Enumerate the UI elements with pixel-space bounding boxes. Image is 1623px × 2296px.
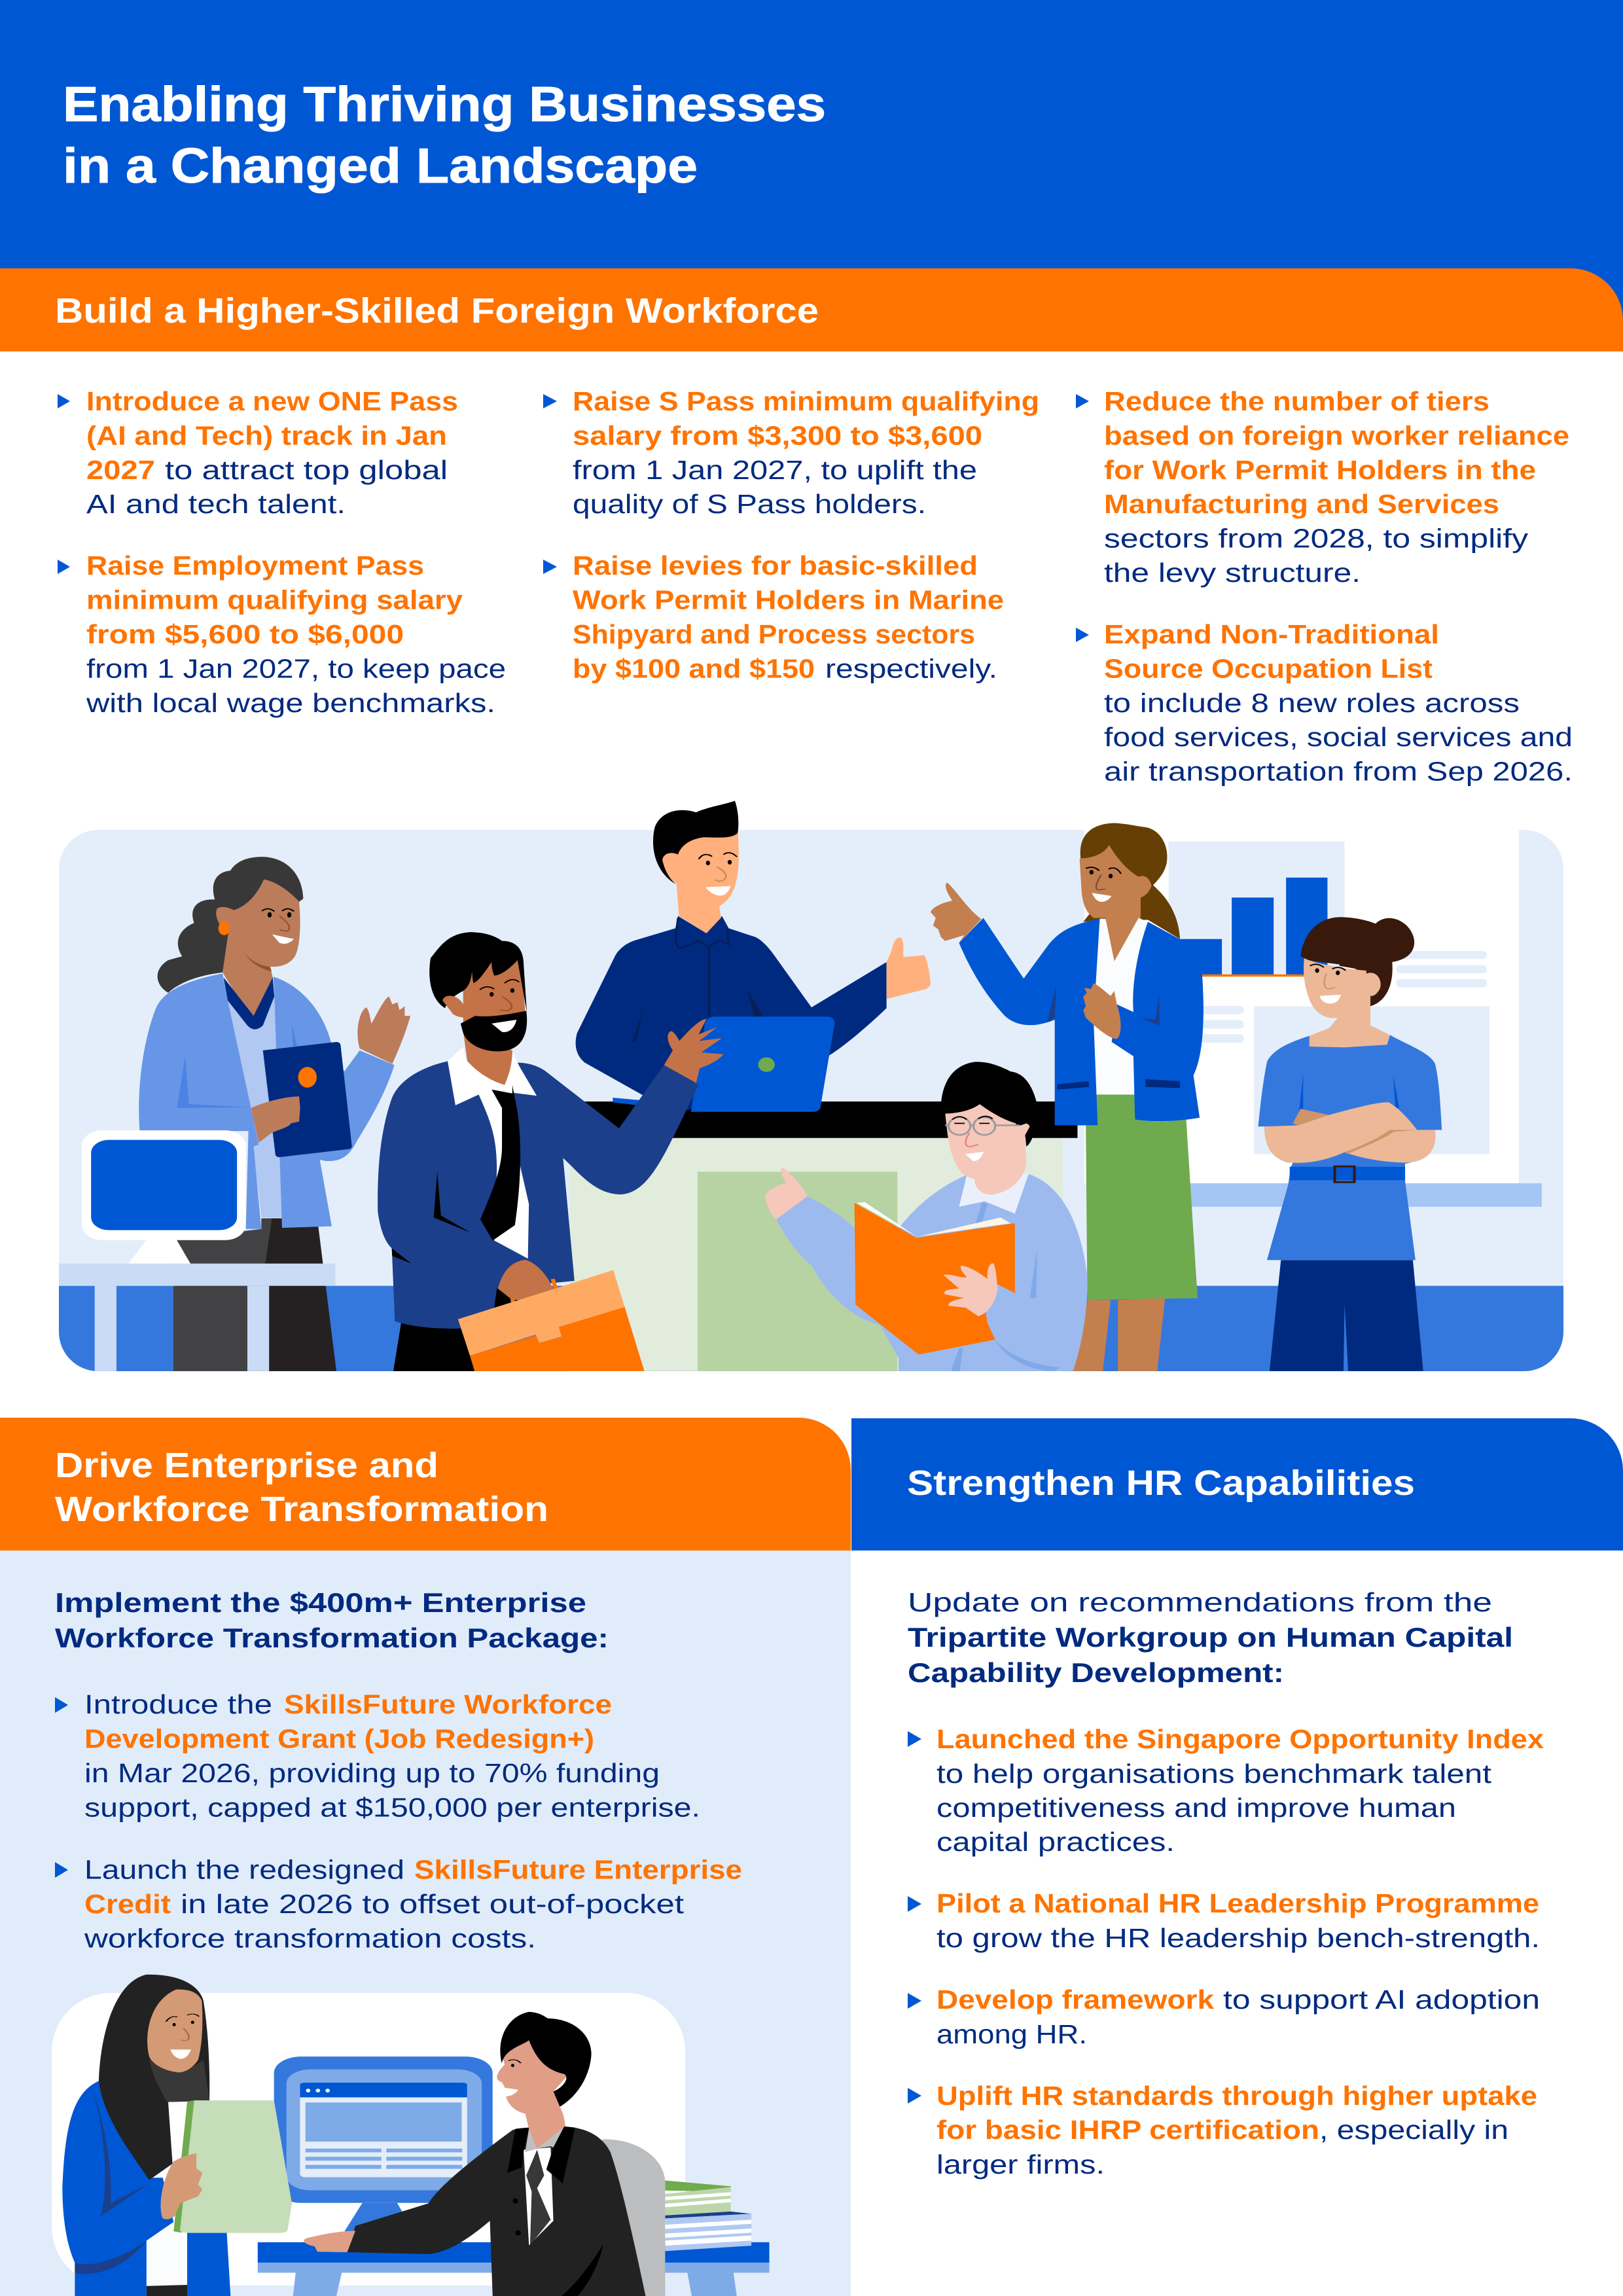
section header: enterprise transformation: Workforce Transformation	[55, 1490, 548, 1529]
intro text: Update on recommendations from the	[908, 1587, 1492, 1617]
section header: enterprise transformation: Drive Enterprise and	[55, 1446, 438, 1485]
panel background	[59, 830, 1563, 1372]
laptop	[691, 1016, 834, 1112]
person: woman in hijab with folder	[62, 1975, 292, 2296]
bullet: job redesign grant: Development Grant (Job Redesign+)	[84, 1724, 594, 1754]
panel: enterprise and workforce transformation	[0, 1418, 851, 2296]
bullet: Employment Pass: from $5,600 to $6,000	[86, 619, 404, 649]
bullet: HR standards: Uplift HR standards through higher uptake	[936, 2081, 1537, 2111]
bullet: framework	[908, 1984, 1540, 2049]
package heading: Implement the $400m+ Enterprise	[55, 1587, 586, 1618]
bullet: S Pass: salary from $3,300 to $3,600	[573, 420, 982, 450]
briefcase	[458, 1260, 645, 1371]
bullet: ONE Pass: (AI and Tech) track in Jan	[86, 420, 447, 450]
bullet: Employment Pass	[58, 550, 506, 718]
title	[63, 77, 826, 193]
bullet: S Pass	[543, 386, 1039, 519]
intro text	[908, 1587, 1513, 1688]
illustration: two colleagues at a computer	[52, 1975, 770, 2296]
bullet: occupation list: air transportation from Sep 2026.	[1104, 757, 1573, 787]
bullet: levies	[543, 550, 1004, 683]
package heading	[55, 1587, 609, 1653]
bullet: ONE Pass: AI and tech talent.	[86, 489, 346, 519]
bullet: levies: Raise levies for basic-skilled	[573, 550, 978, 581]
person: bearded man with briefcase	[378, 932, 724, 1371]
bullet: occupation list: food services, social services and	[1104, 722, 1573, 752]
bullet: Employment Pass: minimum qualifying salary	[86, 585, 463, 615]
bullet: levies: Work Permit Holders in Marine	[573, 585, 1004, 615]
bullet: Employment Pass: Raise Employment Pass	[86, 550, 424, 581]
bullet: framework: among HR.	[936, 2019, 1087, 2049]
illustration: team in office	[59, 800, 1563, 1372]
bullet: job redesign grant: Introduce the	[84, 1689, 272, 1719]
section header: HR capabilities: Strengthen HR Capabilities	[907, 1463, 1415, 1503]
bullet: opportunity index: Launched the Singapore Opportunity Index	[936, 1724, 1544, 1754]
bullet: ONE Pass	[58, 386, 458, 519]
person: man with laptop giving thumbs up	[576, 800, 931, 1116]
package heading: Workforce Transformation Package:	[55, 1623, 609, 1653]
title: Enabling Thriving Businesses	[63, 77, 826, 132]
bullet: enterprise credit: Credit	[84, 1889, 171, 1919]
section header: foreign workforce: Build a Higher-Skilled Foreign Workforce	[55, 291, 819, 331]
bullet: levies: by $100 and $150	[573, 653, 815, 683]
person: woman in blue blazer	[931, 823, 1204, 1371]
bullet: Employment Pass: from 1 Jan 2027, to keep pace	[86, 653, 506, 683]
bullet: occupation list: to include 8 new roles across	[1104, 688, 1520, 718]
bullet: tiers: Reduce the number of tiers	[1104, 386, 1489, 416]
bullet: Employment Pass: with local wage benchmarks.	[86, 688, 495, 718]
bullet: opportunity index: to help organisations benchmark talent	[936, 1759, 1492, 1789]
bullet: ONE Pass: 2027	[86, 455, 155, 485]
bullet: enterprise credit	[55, 1855, 742, 1953]
bullet: S Pass: from 1 Jan 2027, to uplift the	[573, 455, 977, 485]
bullet: tiers: sectors from 2028, to simplify	[1104, 524, 1529, 554]
desk with monitor	[59, 1130, 335, 1371]
text column 3	[1076, 386, 1573, 787]
section header: HR capabilities	[851, 1418, 1623, 1551]
bullet: enterprise credit: in late 2026 to offset out-of-pocket	[181, 1889, 685, 1919]
bullet: HR standards: larger firms.	[936, 2149, 1105, 2179]
bullet: enterprise credit: SkillsFuture Enterprise	[414, 1855, 742, 1885]
bullet: occupation list: Source Occupation List	[1104, 653, 1433, 683]
bullet: HR standards	[908, 2081, 1537, 2179]
bullet: leadership programme: to grow the HR leadership bench-strength.	[936, 1923, 1540, 1953]
bullet: levies: Shipyard and Process sectors	[573, 619, 975, 649]
bullet: HR standards: for basic IHRP certification	[936, 2115, 1319, 2145]
bullet: framework: to support AI adoption	[1223, 1984, 1540, 2015]
bullet: leadership programme	[908, 1888, 1540, 1953]
bullet: job redesign grant: SkillsFuture Workforce	[284, 1689, 612, 1719]
person: woman with tablet at desk	[139, 857, 410, 1371]
bullet: tiers	[1076, 386, 1569, 588]
white backdrop	[52, 1993, 685, 2286]
bullet: job redesign grant: support, capped at $150,000 per enterprise.	[84, 1792, 700, 1822]
person: man in dark suit	[304, 2012, 646, 2296]
person: woman with crossed arms	[1258, 917, 1442, 1371]
text column 1	[58, 386, 506, 718]
bullet: ONE Pass: Introduce a new ONE Pass	[86, 386, 458, 416]
bullet: framework: Develop framework	[936, 1984, 1214, 2015]
intro text: Capability Development:	[908, 1657, 1284, 1688]
reception counter	[569, 1102, 1077, 1371]
bullet: leadership programme: Pilot a National HR Leadership Programme	[936, 1888, 1539, 1918]
bullet: occupation list	[1076, 619, 1573, 787]
bullet: levies: respectively.	[825, 653, 997, 683]
bullet: ONE Pass: to attract top global	[165, 455, 448, 485]
bullet: job redesign grant	[55, 1689, 700, 1822]
bullet: job redesign grant: in Mar 2026, providing up to 70% funding	[84, 1758, 660, 1788]
bullet: tiers: for Work Permit Holders in the	[1104, 455, 1536, 485]
intro text: Tripartite Workgroup on Human Capital	[908, 1622, 1513, 1653]
desk, computer and books	[258, 2056, 770, 2296]
bullet: opportunity index: competitiveness and improve human	[936, 1793, 1456, 1823]
bullet: S Pass: quality of S Pass holders.	[573, 489, 926, 519]
folder	[173, 2100, 292, 2233]
bullet: tiers: the levy structure.	[1104, 558, 1361, 588]
panel: strengthen HR capabilities	[851, 1418, 1623, 2179]
text column 2	[543, 386, 1039, 683]
person: seated man reading book	[765, 1062, 1088, 1371]
presentation board and bar chart	[1084, 830, 1542, 1207]
header banner	[0, 0, 1623, 351]
bullet: enterprise credit: workforce transformation costs.	[84, 1923, 536, 1953]
bullet: HR standards: , especially in	[1319, 2115, 1508, 2145]
open book	[855, 1202, 1015, 1355]
bullet: S Pass: Raise S Pass minimum qualifying	[573, 386, 1039, 416]
bullet: occupation list: Expand Non-Traditional	[1104, 619, 1439, 649]
bullet: tiers: Manufacturing and Services	[1104, 489, 1499, 519]
section header: foreign workforce	[0, 268, 1623, 351]
bullet: tiers: based on foreign worker reliance	[1104, 420, 1569, 450]
section header: enterprise transformation	[0, 1418, 851, 1551]
bullet: opportunity index: capital practices.	[936, 1827, 1175, 1857]
bullet: enterprise credit: Launch the redesigned	[84, 1855, 404, 1885]
bullet: opportunity index	[908, 1724, 1544, 1857]
title: in a Changed Landscape	[63, 138, 698, 193]
